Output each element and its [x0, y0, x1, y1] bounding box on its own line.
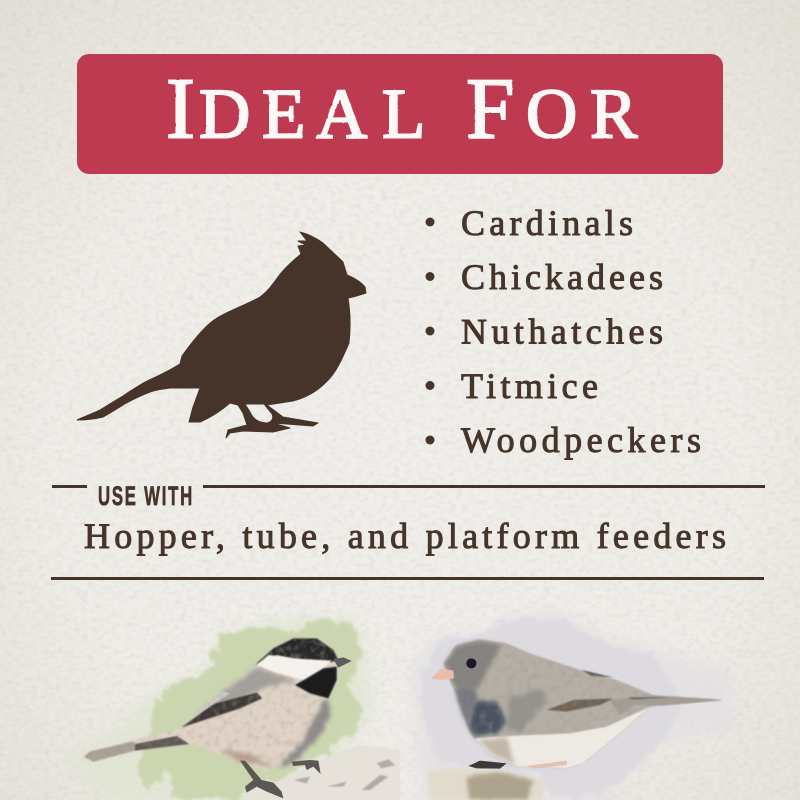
- branch: [237, 745, 400, 800]
- chickadee cheek and bib: [257, 655, 337, 698]
- list item: Woodpeckers: Woodpeckers: [461, 420, 701, 460]
- bird list: [426, 203, 701, 460]
- chickadee beak: [333, 657, 352, 668]
- list item: Titmice: Titmice: [461, 366, 598, 406]
- use with label: USE WITH: [98, 481, 192, 511]
- list item: Cardinals: Cardinals: [461, 203, 633, 243]
- list item: Chickadees: Chickadees: [461, 257, 663, 297]
- watercolor chickadee: [67, 618, 400, 800]
- chickadee body: [84, 638, 338, 770]
- title text: I: [166, 60, 195, 156]
- green wash: [67, 618, 370, 800]
- title banner: [77, 54, 723, 174]
- cardinal silhouette icon: [77, 232, 366, 438]
- junco belly: [475, 707, 650, 769]
- junco beak: [431, 668, 454, 680]
- chickadee legs: [240, 760, 321, 798]
- junco body: [443, 639, 723, 768]
- use with section: [51, 481, 765, 580]
- list item: Nuthatches: Nuthatches: [461, 312, 663, 352]
- title text: OR: [526, 76, 638, 154]
- grey wash: [413, 613, 733, 800]
- feeder types text: Hopper, tube, and platform feeders: [84, 516, 726, 556]
- stump: [427, 768, 543, 800]
- title text: F: [466, 60, 514, 156]
- junco eye: [466, 658, 476, 668]
- junco feet: [468, 761, 507, 769]
- watercolor junco: [413, 613, 733, 800]
- title text: DEAL: [199, 76, 425, 154]
